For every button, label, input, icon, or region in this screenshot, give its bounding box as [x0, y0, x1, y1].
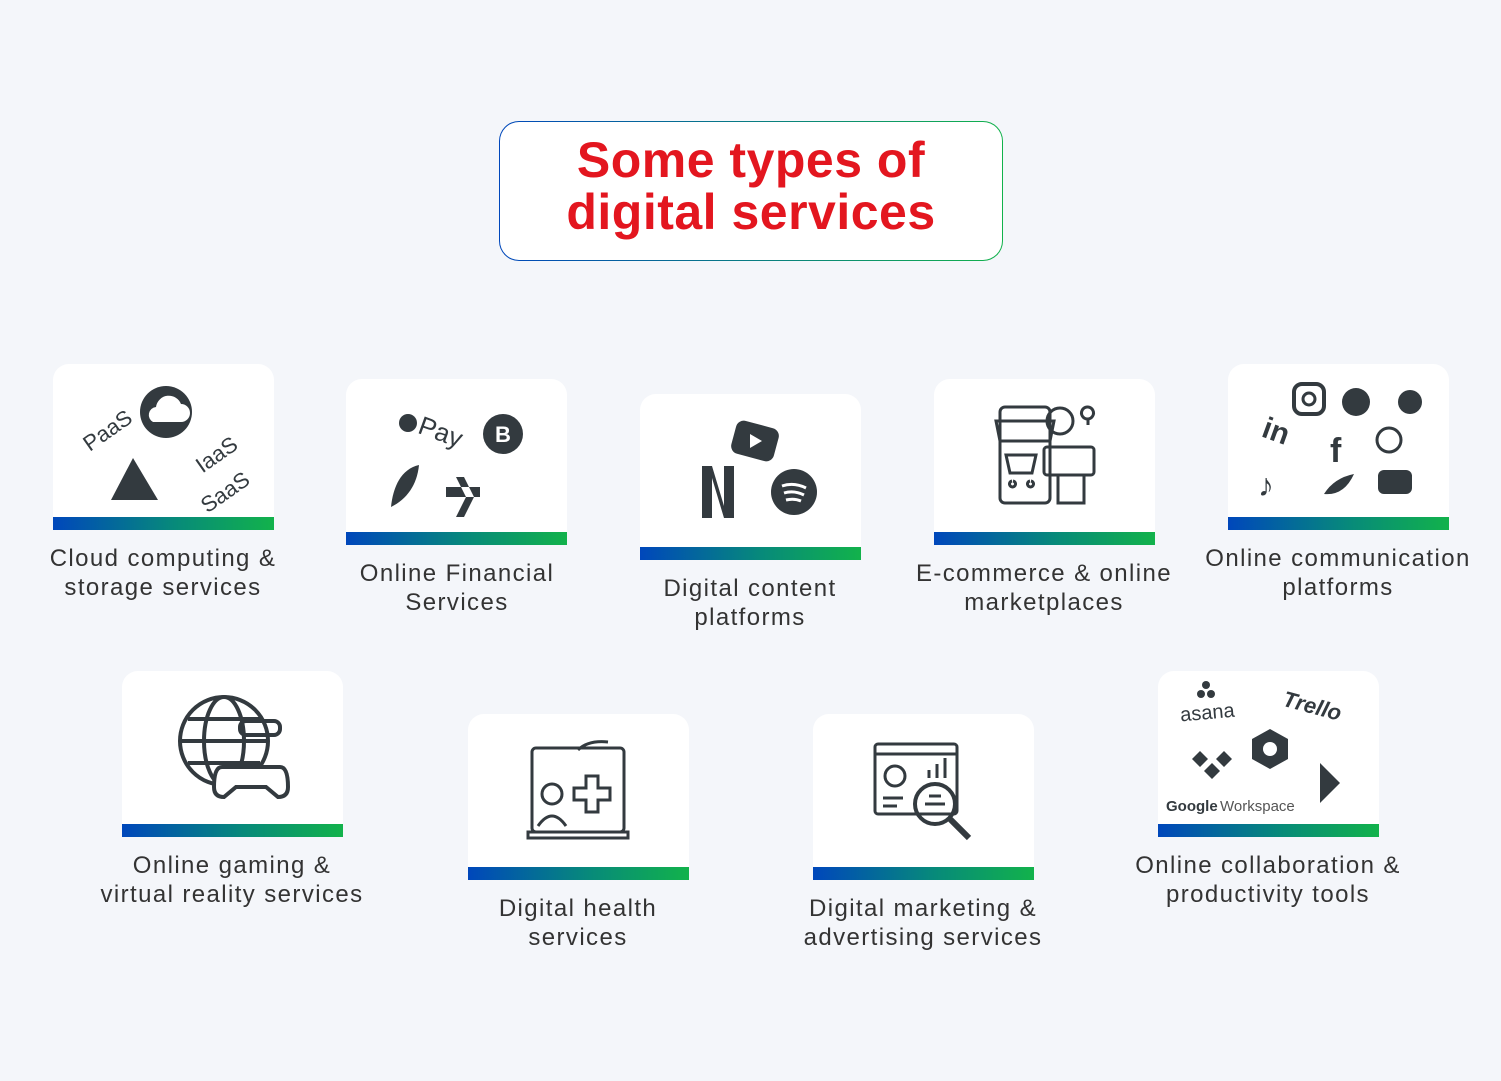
- panel: collaboration: Google: [1166, 798, 1218, 815]
- panel: communication: ♪: [1258, 467, 1274, 503]
- label: marketing: Digital marketing &: [809, 895, 1037, 922]
- label: marketing: advertising services: [804, 924, 1042, 951]
- panel: cloud: SaaS: [196, 466, 254, 517]
- label: finance: Services: [405, 589, 509, 616]
- title: Some types of: [577, 132, 925, 188]
- panel: cloud: [53, 364, 274, 530]
- label: cloud: [50, 545, 276, 601]
- panel: communication: in: [1258, 412, 1294, 452]
- panel: gaming: [122, 671, 343, 837]
- label: communication: platforms: [1282, 574, 1394, 601]
- label: ecommerce: [916, 560, 1172, 616]
- label: content: Digital content: [663, 575, 837, 602]
- panel: finance: Pay: [415, 410, 467, 454]
- panel: ecommerce: [934, 379, 1155, 545]
- panel: finance: [346, 379, 567, 545]
- label: content: platforms: [694, 604, 806, 631]
- panel: health: [468, 714, 689, 880]
- label: ecommerce: marketplaces: [964, 589, 1124, 616]
- label: health: Digital health: [499, 895, 657, 922]
- label: gaming: [100, 852, 364, 908]
- label: collaboration: Online collaboration &: [1135, 852, 1401, 879]
- panel: communication: [1228, 364, 1449, 530]
- panel: content: [640, 394, 861, 560]
- panel: cloud: IaaS: [191, 431, 242, 478]
- panel: cloud: PaaS: [78, 405, 137, 456]
- label: gaming: virtual reality services: [100, 881, 364, 908]
- panel: collaboration: Workspace: [1220, 798, 1295, 815]
- panel: marketing: [813, 714, 1034, 880]
- panel: finance: B: [495, 422, 511, 447]
- label: content: [663, 575, 837, 631]
- label: finance: [360, 560, 554, 616]
- panel: communication: f: [1330, 432, 1342, 470]
- label: health: [499, 895, 657, 951]
- label: gaming: Online gaming &: [133, 852, 331, 879]
- panel: collaboration: [1158, 671, 1379, 837]
- label: ecommerce: E-commerce & online: [916, 560, 1172, 587]
- title: digital services: [566, 184, 936, 240]
- title: [499, 121, 1003, 261]
- label: health: services: [528, 924, 628, 951]
- label: cloud: storage services: [64, 574, 262, 601]
- label: collaboration: [1135, 852, 1401, 908]
- label: finance: Online Financial: [360, 560, 554, 587]
- label: marketing: [804, 895, 1042, 951]
- label: communication: Online communication: [1205, 545, 1471, 572]
- panel: collaboration: Trello: [1280, 686, 1344, 726]
- label: cloud: Cloud computing &: [50, 545, 276, 572]
- label: collaboration: productivity tools: [1166, 881, 1370, 908]
- label: communication: [1205, 545, 1471, 601]
- panel: collaboration: asana: [1179, 700, 1236, 726]
